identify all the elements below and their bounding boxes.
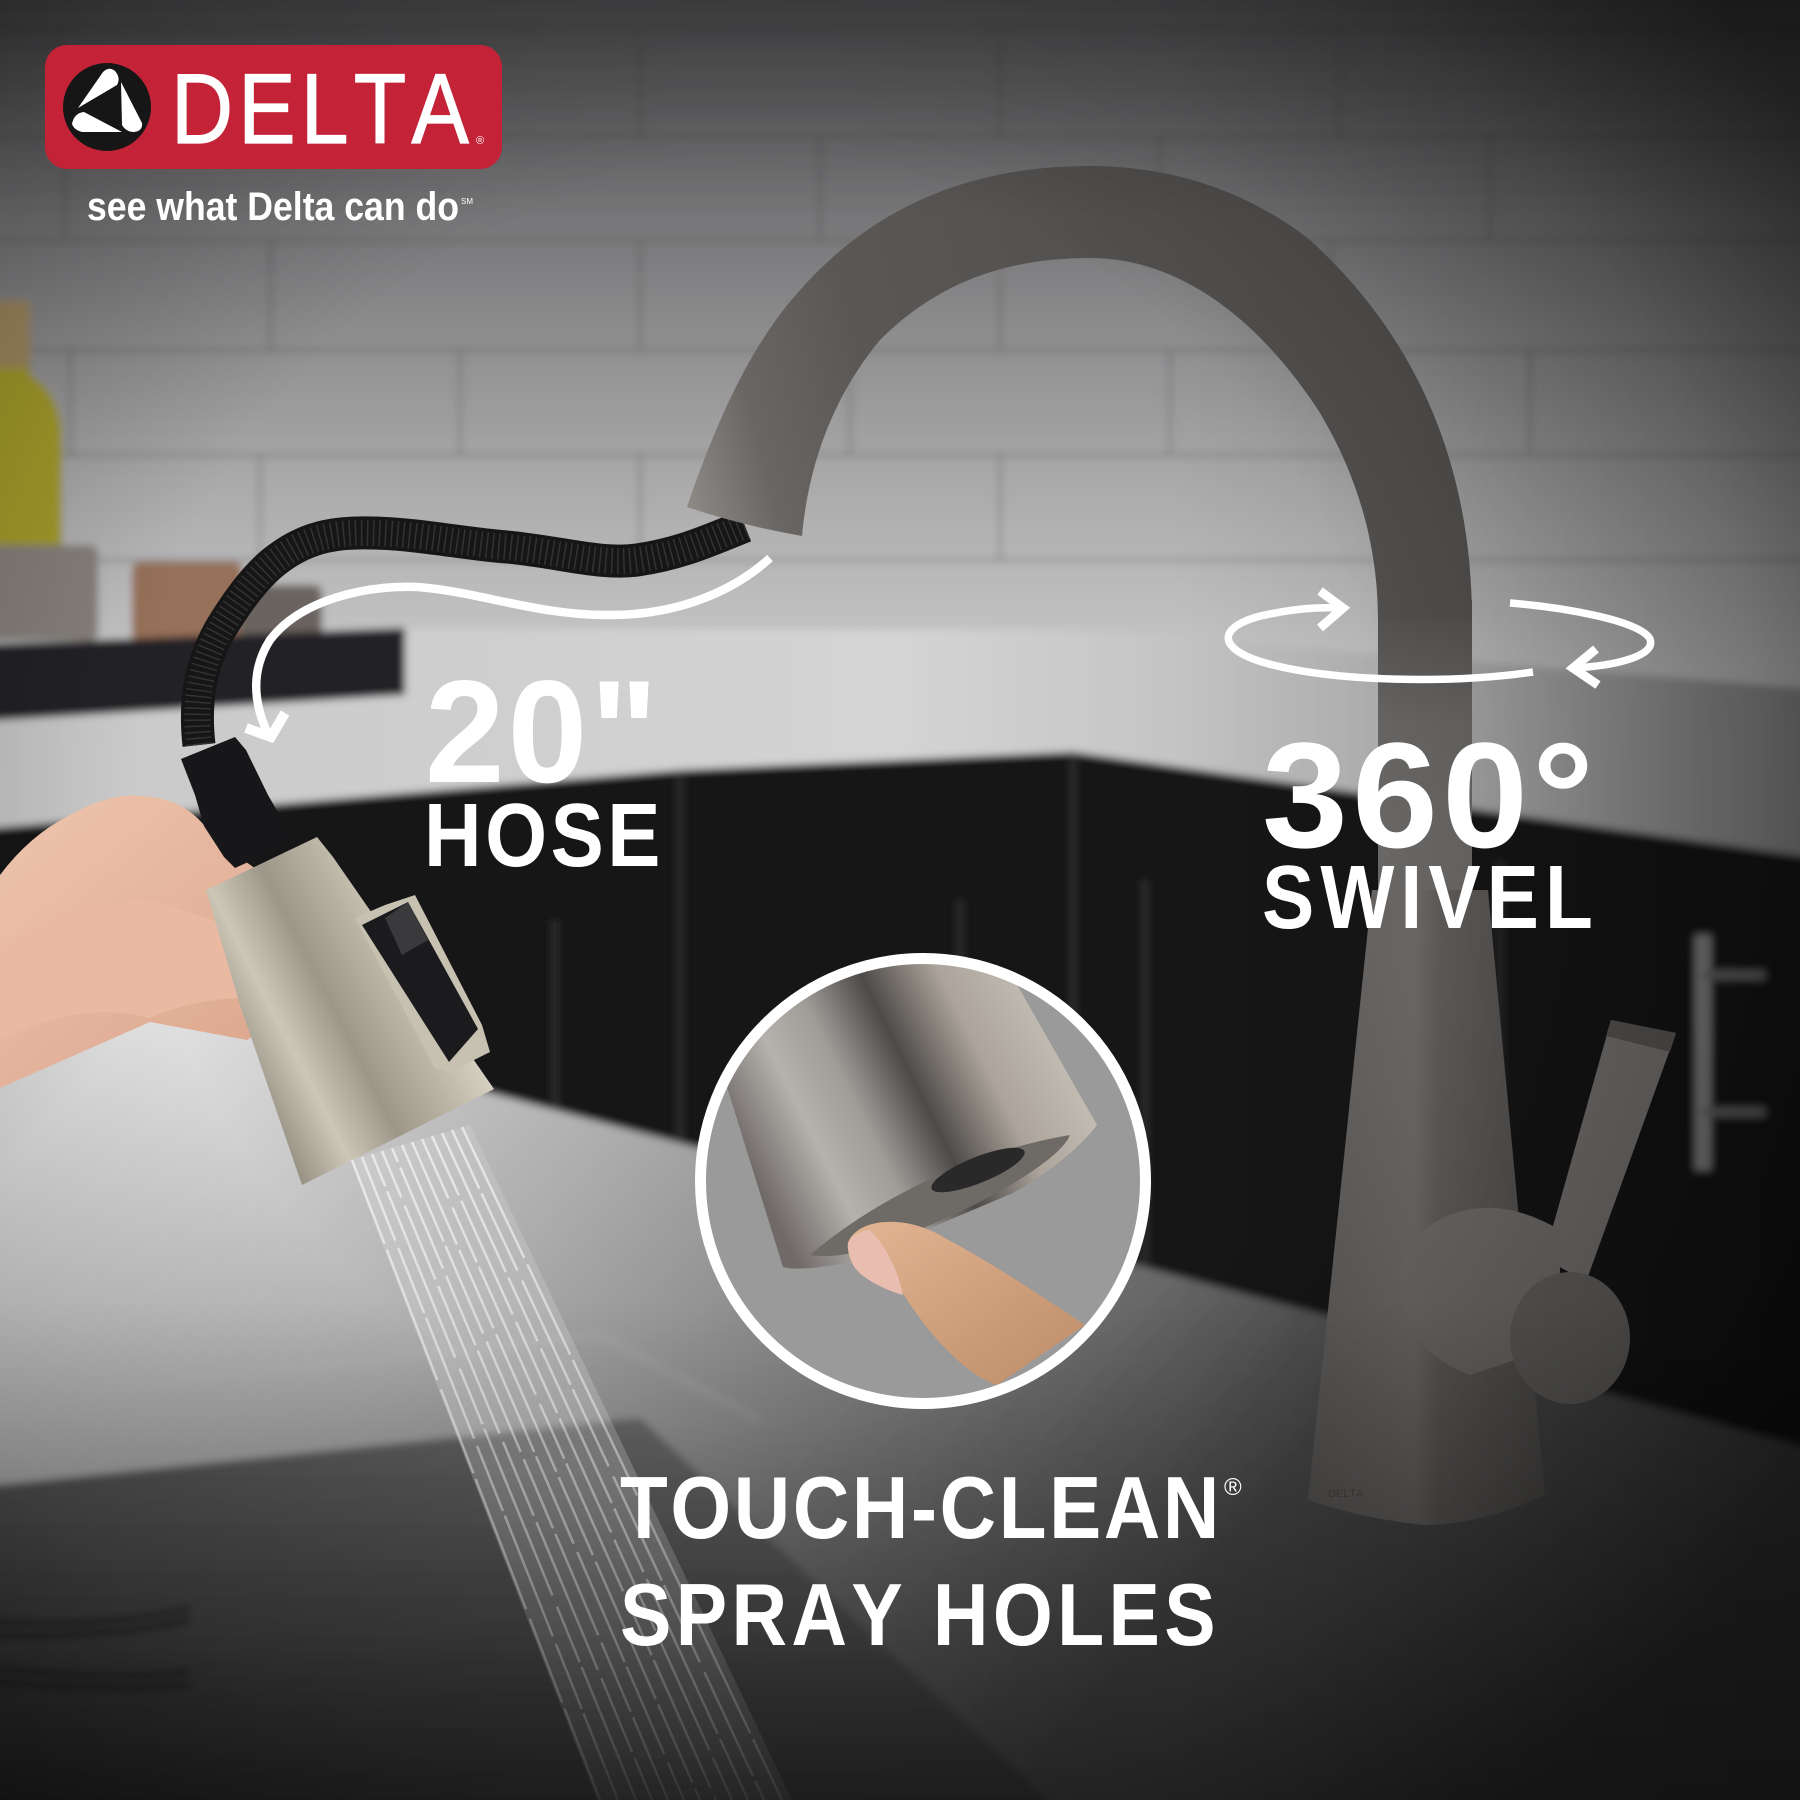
hose word: HOSE <box>424 786 664 886</box>
wordmark: DELTA <box>171 53 474 164</box>
hand <box>0 795 360 1088</box>
forks <box>0 1608 190 1688</box>
hose length arrow <box>246 558 770 737</box>
collar <box>181 737 288 868</box>
buttons <box>355 895 490 1072</box>
inset ring <box>700 958 1146 1404</box>
spray slot <box>931 1148 1025 1192</box>
swivel word: SWIVEL <box>1262 848 1599 948</box>
logo badge <box>45 45 502 169</box>
tiled wall <box>0 0 1800 780</box>
swivel arrows <box>1228 591 1651 685</box>
nozzle face <box>810 1135 1070 1256</box>
touch-clean heading: TOUCH-CLEAN <box>620 1458 1222 1557</box>
registered mark: ® <box>1224 1474 1242 1501</box>
label: touch-clean spray holes <box>620 1458 1242 1664</box>
tray <box>0 628 405 722</box>
faucet stem <box>1378 600 1472 910</box>
360 degree figure: 360° <box>1262 711 1598 879</box>
head body <box>206 837 494 1185</box>
sink basin <box>0 1418 1080 1800</box>
oil bottle <box>0 300 62 545</box>
water spray <box>350 1125 792 1800</box>
inset background <box>701 959 1145 1403</box>
back counter <box>0 628 1800 860</box>
base maker mark: DELTA <box>1328 1488 1364 1500</box>
thumb <box>0 900 298 1040</box>
20 inch figure: 20" <box>425 650 661 813</box>
fingernail <box>848 1230 903 1295</box>
spray head <box>181 737 494 1185</box>
label: 360 swivel <box>1262 711 1599 948</box>
spray holes heading: SPRAY HOLES <box>620 1565 1220 1664</box>
service mark: SM <box>461 197 473 206</box>
inset photo <box>727 940 1097 1385</box>
fingertip <box>848 1222 1085 1385</box>
sink rim <box>0 1335 760 1420</box>
handle <box>1400 1020 1676 1404</box>
logo mark <box>63 63 151 151</box>
thumbnail <box>240 946 292 987</box>
logo <box>45 45 502 229</box>
tagline: see what Delta can do <box>87 185 459 229</box>
pull-down hose <box>197 526 745 745</box>
cabinets <box>0 752 1800 1470</box>
jars <box>0 545 322 645</box>
right swivel arrow <box>1510 603 1651 685</box>
left swivel arrow <box>1228 591 1533 679</box>
faucet <box>197 166 1676 1525</box>
faucet base <box>1308 890 1545 1525</box>
label: 20 inch hose <box>424 650 664 886</box>
inset: touch-clean spray holes <box>700 940 1146 1404</box>
gooseneck spout <box>687 166 1472 620</box>
registered mark: ® <box>476 135 484 147</box>
foreground counter <box>0 952 1800 1800</box>
